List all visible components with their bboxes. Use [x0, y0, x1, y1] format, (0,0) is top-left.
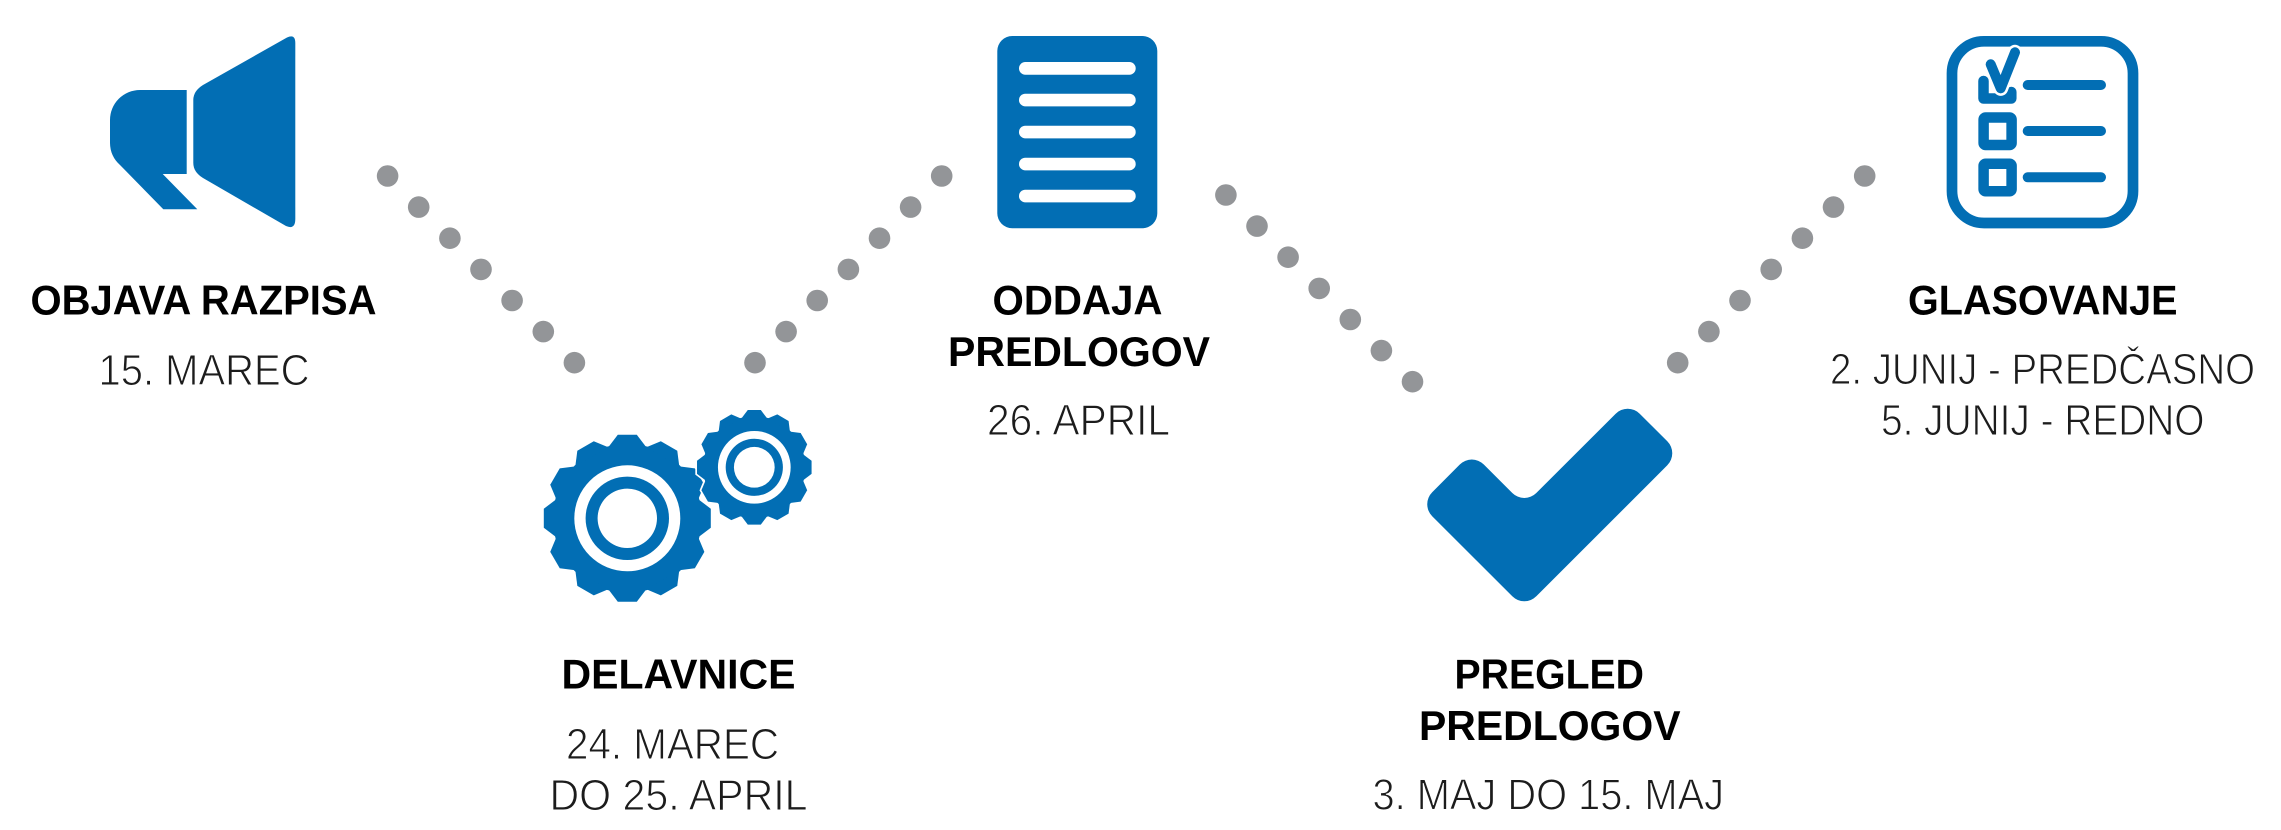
step: Delavnice: DO 25. APRIL	[550, 771, 808, 820]
step: Pregled predlogov: PREGLED	[1454, 650, 1644, 698]
icon: checkmark	[1427, 409, 1672, 601]
dotted connector: announcement to workshops	[377, 165, 585, 374]
step: Oddaja predlogov	[948, 276, 1210, 445]
step: Glasovanje: GLASOVANJE	[1908, 276, 2178, 324]
step: Objava razpisa	[30, 276, 376, 395]
step: Pregled predlogov: 3. MAJ DO 15. MAJ	[1372, 770, 1724, 820]
step: Pregled predlogov: PREDLOGOV	[1419, 702, 1681, 749]
step: Objava razpisa: 15. MAREC	[98, 346, 310, 395]
dotted connector: submission to review	[1215, 184, 1423, 393]
icon: document	[997, 36, 1157, 228]
step: Delavnice: DELAVNICE	[562, 650, 796, 698]
step: Glasovanje: 5. JUNIJ - REDNO	[1881, 396, 2204, 445]
icon: checklist	[1952, 41, 2133, 223]
icon: gears	[544, 410, 812, 602]
step: Objava razpisa: OBJAVA RAZPISA	[30, 276, 376, 324]
step: Delavnice	[550, 650, 808, 820]
icon: megaphone	[110, 36, 295, 227]
step: Oddaja predlogov: PREDLOGOV	[948, 328, 1210, 375]
step: Pregled predlogov	[1372, 650, 1724, 820]
step: Oddaja predlogov: ODDAJA	[992, 276, 1162, 324]
step: Delavnice: 24. MAREC	[566, 720, 779, 769]
step: Oddaja predlogov: 26. APRIL	[987, 396, 1170, 445]
dotted connector: workshops to submission	[744, 165, 952, 374]
dotted connector: review to voting	[1667, 165, 1875, 374]
step: Glasovanje	[1830, 276, 2255, 445]
